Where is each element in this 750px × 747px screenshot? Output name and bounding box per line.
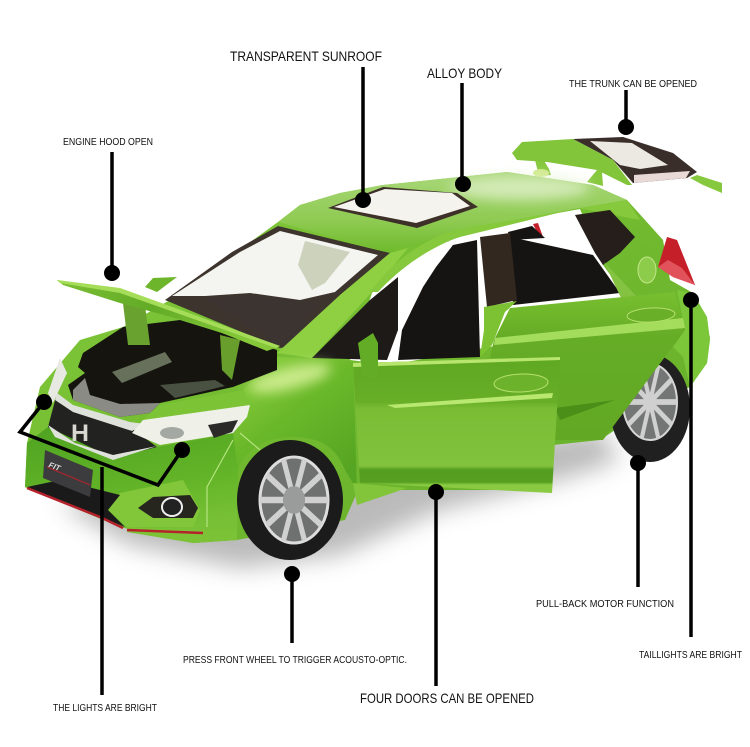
label: trunk: THE TRUNK CAN BE OPENED bbox=[569, 78, 697, 90]
front wheel bbox=[237, 440, 343, 560]
leader: transparent sunroof bbox=[355, 67, 371, 208]
windshield bbox=[165, 226, 390, 348]
centre pillar bbox=[480, 233, 517, 307]
label: pull-back motor: PULL-BACK MOTOR FUNCTION bbox=[536, 598, 674, 610]
leader: lights bbox=[20, 394, 190, 695]
car body silhouette bbox=[25, 172, 710, 543]
far side mirror bbox=[145, 277, 177, 292]
car illustration bbox=[25, 137, 722, 560]
engine bay bbox=[68, 303, 277, 420]
label: lights: THE LIGHTS ARE BRIGHT bbox=[53, 702, 157, 714]
label: transparent sunroof: TRANSPARENT SUNROOF bbox=[230, 48, 382, 64]
rear door bbox=[490, 292, 685, 440]
seats and interior bbox=[312, 226, 620, 360]
far-side red light bbox=[533, 223, 543, 237]
leader: trunk bbox=[618, 90, 634, 135]
fuel cap bbox=[638, 257, 656, 283]
leader: front wheel bbox=[284, 566, 300, 643]
front fender bbox=[233, 357, 357, 490]
ground shadow bbox=[60, 430, 620, 568]
license plate: FIT bbox=[47, 460, 63, 473]
left headlight bbox=[48, 358, 67, 403]
sunroof bbox=[328, 187, 478, 228]
leader: pull-back motor bbox=[630, 455, 646, 587]
side mirror bbox=[358, 333, 378, 377]
fog light bbox=[138, 495, 198, 518]
door opening bbox=[350, 209, 630, 365]
open trunk glass bbox=[573, 137, 697, 183]
front door bbox=[353, 357, 560, 493]
front lip with red trim bbox=[27, 480, 203, 533]
roof rail band bbox=[370, 200, 640, 292]
label: four doors: FOUR DOORS CAN BE OPENED bbox=[360, 690, 534, 706]
door sill flap bbox=[353, 483, 407, 505]
grille and chrome bbox=[48, 393, 157, 460]
right headlight bbox=[132, 405, 250, 445]
rear bumper bbox=[673, 290, 710, 387]
leader: engine hood bbox=[104, 152, 120, 281]
label: front wheel: PRESS FRONT WHEEL TO TRIGGER ACOUSTO-OPTIC. bbox=[183, 654, 407, 666]
taillight bbox=[658, 237, 695, 285]
license plate bbox=[43, 450, 93, 497]
label: engine hood: ENGINE HOOD OPEN bbox=[63, 136, 153, 148]
roof panel bbox=[278, 172, 627, 253]
front bumper and lower fascia bbox=[25, 427, 260, 543]
rear wheel bbox=[610, 354, 690, 462]
leader: four doors bbox=[428, 484, 444, 686]
sill behind rear door bbox=[604, 262, 640, 300]
leader: alloy body bbox=[455, 83, 471, 192]
open trunk lid bbox=[512, 139, 632, 185]
open hood bbox=[57, 280, 280, 351]
rear quarter window bbox=[575, 210, 635, 265]
trunk lid struts bbox=[533, 159, 603, 186]
bay lip bbox=[143, 390, 250, 420]
label: alloy body: ALLOY BODY bbox=[427, 65, 503, 81]
leader: taillights bbox=[683, 292, 699, 637]
grille and chrome: H bbox=[71, 420, 89, 447]
A-pillar highlight bbox=[277, 248, 408, 358]
